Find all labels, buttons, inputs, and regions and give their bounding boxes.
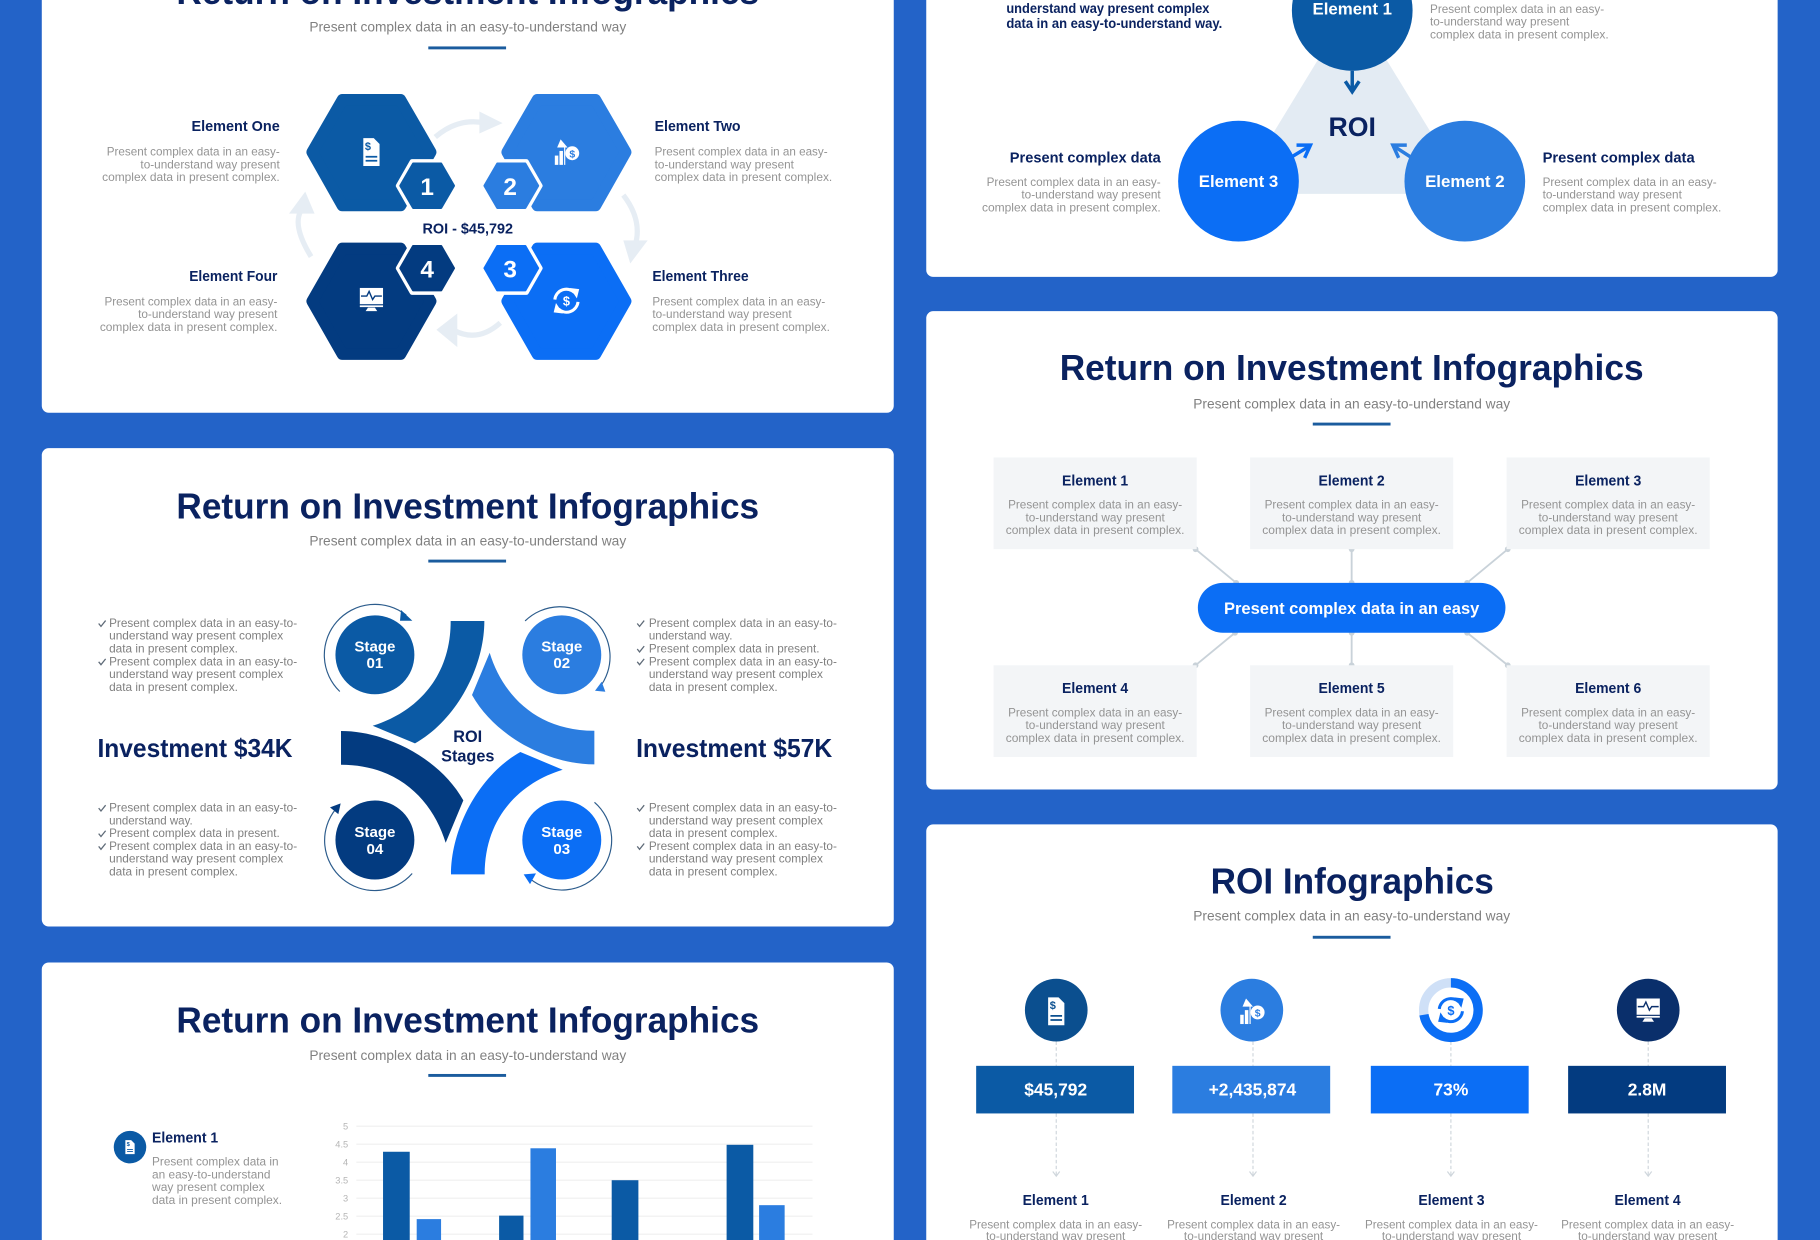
box element 2: [1250, 457, 1453, 549]
text: element two: [655, 118, 832, 184]
heading: Return on Investment Infographics: [176, 1000, 759, 1041]
value box 2: +2,435,874: [1209, 1079, 1297, 1099]
icon: sync money: $: [563, 293, 570, 308]
stage 02: [522, 615, 601, 694]
text: left: [982, 150, 1161, 214]
text: element 1: [969, 1192, 1142, 1240]
text: element 3: Present complex data in an easy-: [1365, 1217, 1538, 1231]
stage 04: Stage: [354, 824, 395, 841]
stage 01: [335, 615, 414, 694]
arrow tips: [1053, 1171, 1652, 1176]
text: right: complex data in present complex.: [1543, 200, 1721, 214]
bar chart: 4.5: [335, 1140, 348, 1150]
subtitle: Present complex data in an easy-to-understand way: [1193, 908, 1510, 924]
circle element 3: Element 3: [1199, 172, 1278, 191]
stage 04: [335, 801, 414, 879]
text: element three: [652, 268, 830, 334]
subtitle: Present complex data in an easy-to-understand way: [309, 1047, 626, 1063]
stage 01: Stage: [354, 638, 395, 655]
bar chart: 4: [343, 1158, 348, 1168]
icon: donut 73 percent: $: [1447, 1003, 1454, 1018]
text: right: [1543, 150, 1721, 214]
text: element 2: [1167, 1192, 1340, 1240]
box element 5: complex data in present complex.: [1262, 731, 1441, 745]
panel: ROI stages: [42, 448, 894, 927]
stage 02: 02: [553, 655, 570, 672]
heading: Return on Investment Infographics: [1060, 347, 1644, 388]
box element 2: complex data in present complex.: [1262, 523, 1441, 537]
bullets: bottom right: data in present complex.: [649, 864, 778, 878]
hexagon 1: [312, 100, 456, 210]
center pill: Present complex data in an easy: [1224, 599, 1480, 618]
bullets: top right: understand way.: [649, 629, 732, 643]
bullets: bottom right: data in present complex.: [649, 826, 778, 840]
box element 1: Element 1: [1062, 472, 1128, 489]
icon: growth circle: [1220, 979, 1283, 1041]
icon: monitor: [360, 288, 383, 311]
bar chart: 2.5: [335, 1212, 348, 1222]
bullets: bottom right: [637, 801, 837, 878]
text: element two: Present complex data in an easy-: [655, 145, 828, 159]
text: intro: data in an easy-to-understand way.: [1006, 15, 1222, 31]
investment right: Investment $57K: [636, 735, 833, 763]
box element 4: to-understand way present: [1025, 718, 1165, 732]
panel: ROI triangle: [926, 0, 1778, 277]
text: element 2: Present complex data in an easy-: [1167, 1217, 1340, 1231]
curved segment 1: [373, 621, 484, 743]
circle element 1: Element 1: [1312, 0, 1392, 19]
dashed connectors: [1056, 1041, 1648, 1175]
text: element 3: [1365, 1192, 1538, 1240]
bullets: bottom left: understand way present complex: [109, 852, 283, 866]
box element 1: [994, 457, 1197, 549]
bullets: top right: understand way present complex: [649, 667, 823, 681]
text: element four: Element Four: [189, 268, 278, 285]
text: top right: complex data in present complex.: [1430, 27, 1609, 41]
circle element 3: [1178, 121, 1299, 241]
icon: sync money: [554, 288, 579, 313]
text: element 4: [1561, 1192, 1734, 1240]
circle element 2: [1404, 121, 1525, 241]
bullets: top left: data in present complex.: [109, 680, 238, 694]
center label: Stages: [441, 748, 494, 766]
box element 3: to-understand way present: [1539, 510, 1678, 524]
subtitle: Present complex data in an easy-to-understand way: [309, 18, 626, 34]
text: element 1: data in present complex.: [152, 1193, 282, 1207]
bar chart: 2: [343, 1230, 348, 1240]
text: left: complex data in present complex.: [982, 200, 1161, 214]
curved segment 3: [451, 752, 563, 874]
value box 3: [1371, 1066, 1529, 1113]
text: element three: Element Three: [652, 268, 749, 285]
stage 04: 04: [367, 841, 384, 858]
text: top right: [1430, 2, 1609, 41]
stage 1 ring: [324, 604, 412, 691]
hexagon 3: 3: [503, 256, 517, 283]
stage 3 ring: [524, 802, 612, 890]
box element 3: Element 3: [1575, 472, 1641, 489]
hexagon 4: 4: [420, 256, 434, 283]
arrow down: [1345, 71, 1359, 92]
ROI label: ROI: [1329, 112, 1376, 142]
text: intro: understand way present complex: [1006, 0, 1210, 16]
text: element 1: an easy-to-understand: [152, 1167, 270, 1181]
stage 01: 01: [367, 655, 383, 672]
triangle: [1236, 3, 1468, 194]
box element 2: Present complex data in an easy-: [1265, 498, 1439, 512]
text: element four: Present complex data in an easy-: [104, 294, 277, 308]
bullets: bottom left: Present complex data in an easy-to-: [109, 839, 297, 853]
text: element two: to-understand way present: [655, 157, 795, 171]
circle element 1: [1292, 0, 1413, 71]
icon: document circle: [1025, 979, 1088, 1041]
icon: document: [363, 138, 380, 166]
bullets: bottom left: Present complex data in present.: [109, 826, 280, 840]
center label: [441, 728, 494, 766]
icon: element 1 document: [114, 1131, 146, 1163]
bullets: top right: data in present complex.: [649, 680, 778, 694]
bullets: top left: Present complex data in an easy-to-: [109, 654, 297, 668]
text: element 4: Present complex data in an easy-: [1561, 1217, 1734, 1231]
box element 4: Present complex data in an easy-: [1008, 705, 1182, 719]
ROI label: ROI - $45,792: [423, 221, 513, 237]
bullets: top right: Present complex data in an easy-to-: [649, 654, 837, 668]
bullets: bottom right: understand way present complex: [649, 852, 823, 866]
text: element one: to-understand way present: [140, 157, 280, 171]
text: element two: Element Two: [655, 118, 741, 135]
icon: monitor circle: [1617, 979, 1680, 1041]
icon: growth circle: $: [1255, 1008, 1261, 1019]
box element 6: Present complex data in an easy-: [1521, 705, 1695, 719]
investment left: Investment $34K: [98, 735, 293, 763]
panel: hub and boxes: [926, 311, 1778, 790]
text: left: Present complex data: [1010, 150, 1161, 167]
bullets: bottom left: [99, 801, 297, 878]
bullets: bottom right: understand way present complex: [649, 813, 823, 827]
icon: growth chart: [555, 139, 579, 165]
bullets: top left: Present complex data in an easy-to-: [109, 616, 297, 630]
box element 5: Present complex data in an easy-: [1265, 705, 1439, 719]
text: top right: to-understand way present: [1430, 15, 1570, 29]
text: element 1: Element 1: [152, 1129, 218, 1146]
text: element one: [102, 118, 280, 184]
value box 1: [976, 1066, 1134, 1113]
bar chart: 3.5: [335, 1176, 348, 1186]
text: top right: Present complex data in an easy-: [1430, 2, 1604, 16]
bullets: bottom right: Present complex data in an easy-to-: [649, 801, 837, 815]
hexagon 2: 2: [503, 174, 517, 201]
stage 03: 03: [553, 841, 570, 858]
box element 3: complex data in present complex.: [1519, 523, 1698, 537]
bullets: top right: Present complex data in an easy-to-: [649, 616, 837, 630]
box element 1: to-understand way present: [1025, 510, 1165, 524]
panel: ROI metrics: [926, 824, 1778, 1240]
bullets: top right: Present complex data in present.: [649, 642, 819, 656]
text: element 1: way present complex: [151, 1180, 265, 1194]
subtitle: Present complex data in an easy-to-understand way: [1193, 396, 1510, 412]
circle element 2: Element 2: [1425, 172, 1505, 191]
stage 2 ring: [525, 607, 610, 692]
cycle arrows: [289, 111, 648, 347]
box element 1: complex data in present complex.: [1006, 523, 1185, 537]
center label: ROI: [453, 728, 482, 746]
box element 2: to-understand way present: [1282, 510, 1422, 524]
hexagon 4: [312, 244, 456, 354]
arrow right-up: [1292, 145, 1310, 158]
text: element four: to-understand way present: [138, 307, 278, 321]
icon: donut 73 percent: [1424, 983, 1478, 1037]
box element 2: Element 2: [1319, 472, 1385, 489]
box element 4: [994, 665, 1197, 757]
text: intro: [1006, 0, 1222, 31]
bullets: top left: understand way present complex: [109, 667, 283, 681]
box element 5: to-understand way present: [1282, 718, 1422, 732]
text: element 4: Element 4: [1615, 1192, 1681, 1209]
center pill: [1198, 583, 1505, 633]
bullets: top right: [637, 616, 837, 694]
bullets: top left: understand way present complex: [109, 629, 283, 643]
text: element one: Element One: [192, 118, 280, 135]
arrow left-up: [1393, 145, 1410, 158]
stage 03: [522, 801, 601, 879]
icon: document circle: $: [1050, 1000, 1056, 1012]
bullets: bottom left: understand way.: [109, 813, 193, 827]
text: element one: complex data in present complex.: [102, 170, 280, 184]
bullets: top left: [99, 616, 297, 694]
text: left: to-understand way present: [1021, 188, 1161, 202]
text: element 3: Element 3: [1418, 1192, 1485, 1209]
value box 4: 2.8M: [1628, 1079, 1666, 1099]
box element 3: [1507, 457, 1710, 549]
curved segment 2: [472, 653, 594, 764]
text: element one: Present complex data in an easy-: [107, 145, 280, 159]
text: element three: Present complex data in an easy-: [652, 294, 825, 308]
text: element three: to-understand way present: [652, 307, 792, 321]
icon: document: $: [365, 141, 371, 153]
heading: Return on Investment Infographics: [176, 485, 759, 526]
box element 5: [1250, 665, 1453, 757]
box element 6: complex data in present complex.: [1519, 731, 1698, 745]
text: right: to-understand way present: [1543, 188, 1682, 202]
box element 3: Present complex data in an easy-: [1521, 498, 1695, 512]
value box 1: $45,792: [1024, 1079, 1087, 1099]
box element 4: Element 4: [1062, 680, 1129, 697]
bullets: bottom left: Present complex data in an easy-to-: [109, 801, 297, 815]
text: element 1: Element 1: [1023, 1192, 1089, 1209]
hexagon 1: 1: [420, 174, 434, 201]
value box 4: [1568, 1066, 1726, 1113]
text: right: Present complex data: [1543, 150, 1695, 167]
bullets: bottom right: Present complex data in an easy-to-: [649, 839, 837, 853]
box element 6: to-understand way present: [1539, 718, 1678, 732]
hexagon 3: [482, 244, 626, 354]
text: element four: [100, 268, 278, 334]
stage 03: Stage: [541, 824, 582, 841]
icon: element 1 document: $: [127, 1142, 131, 1148]
subtitle: Present complex data in an easy-to-understand way: [309, 533, 626, 549]
text: element four: complex data in present complex.: [100, 320, 277, 334]
connectors: [1193, 546, 1511, 668]
curved segment 4: [341, 731, 463, 843]
icon: growth chart: $: [569, 149, 575, 160]
text: element 1: [151, 1129, 282, 1207]
bar chart: 5: [343, 1122, 348, 1132]
text: element 2: Element 2: [1220, 1192, 1287, 1209]
box element 4: complex data in present complex.: [1006, 731, 1185, 745]
stage 02: Stage: [541, 638, 582, 655]
box element 6: Element 6: [1575, 680, 1641, 697]
text: element three: complex data in present complex.: [652, 320, 830, 334]
panel: bar chart: [42, 963, 894, 1240]
panel: hexagon cycle: [42, 0, 894, 413]
box element 1: Present complex data in an easy-: [1008, 498, 1182, 512]
box element 6: [1507, 665, 1710, 757]
text: left: Present complex data in an easy-: [987, 175, 1161, 189]
heading: ROI Infographics: [1211, 860, 1494, 901]
hexagon 2: [482, 100, 626, 210]
box element 5: Element 5: [1319, 680, 1385, 697]
value box 3: 73%: [1433, 1079, 1469, 1099]
value box 2: [1172, 1066, 1330, 1113]
bullets: top left: data in present complex.: [109, 642, 238, 656]
text: element 1: Present complex data in an easy-: [969, 1217, 1142, 1231]
text: right: Present complex data in an easy-: [1543, 175, 1717, 189]
bar chart: 3: [343, 1194, 348, 1204]
stage diagram: [324, 604, 612, 891]
bar chart: [335, 1122, 812, 1240]
bullets: bottom left: data in present complex.: [109, 864, 238, 878]
text: element two: complex data in present complex.: [655, 170, 832, 184]
stage 4 ring: [325, 803, 412, 891]
text: element 1: Present complex data in: [152, 1155, 279, 1169]
